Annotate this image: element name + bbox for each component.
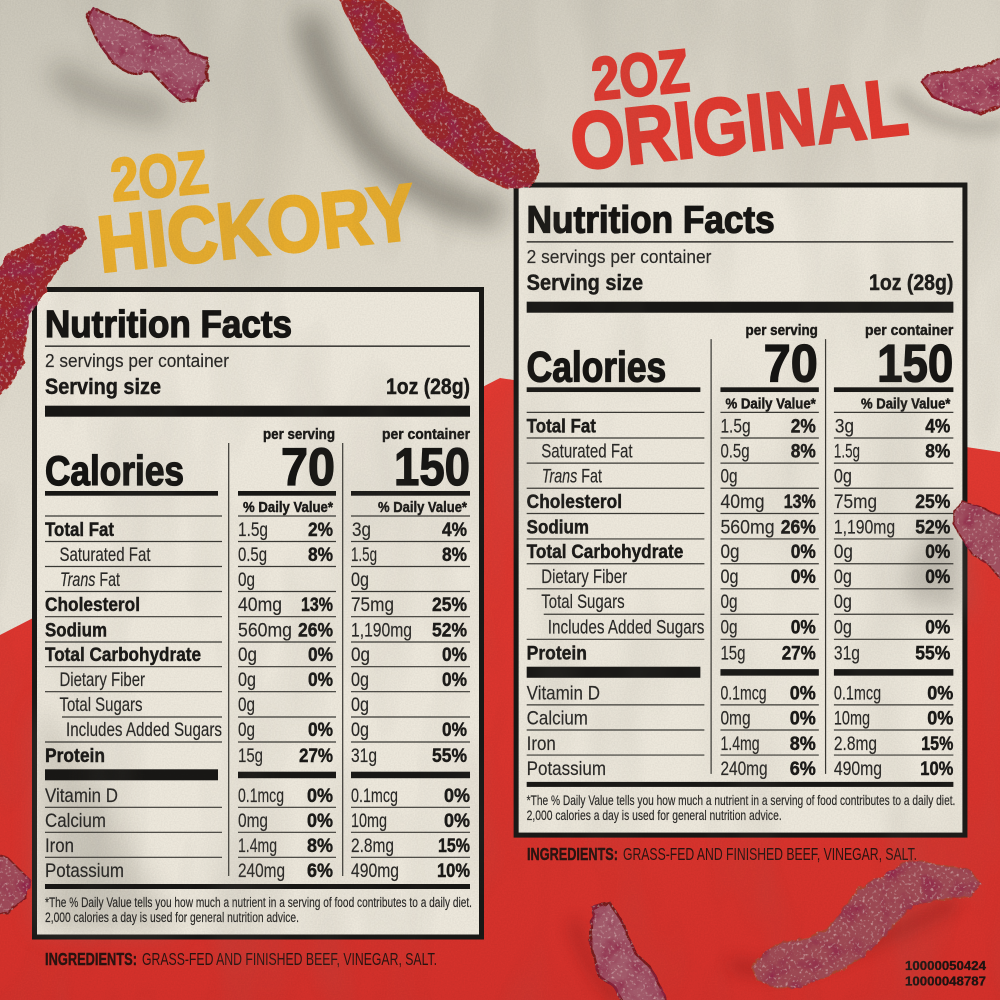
per container column: 0% (444, 810, 470, 832)
per serving column: 15g (720, 642, 746, 664)
per container column: 0g (834, 566, 852, 588)
per serving column: 0mg (720, 708, 751, 730)
nutrient labels: Calcium (527, 708, 588, 730)
per serving column: 0g (720, 466, 738, 488)
per container column: 3g (835, 415, 854, 437)
nutrient labels: Iron (527, 733, 556, 755)
calories header: per serving (746, 322, 818, 339)
icon: jerky piece bottom centre (590, 903, 666, 1000)
per serving column: 6% (790, 758, 816, 780)
nutrient labels: Iron (45, 835, 74, 857)
servings block (527, 241, 953, 313)
per serving column: 240mg (238, 860, 285, 882)
per serving column: 0g (238, 719, 255, 741)
calories header: % Daily Value* (725, 396, 816, 412)
per serving column: 0g (238, 644, 257, 666)
calories header: % Daily Value* (861, 396, 951, 412)
per container column: 52% (915, 516, 950, 538)
heading: 2oz Original: 2OZ (589, 37, 692, 113)
per serving column: 0% (307, 810, 333, 832)
panel: hickory nutrition facts (34, 290, 482, 937)
per container column: 0g (351, 719, 369, 741)
panel shading (903, 507, 961, 617)
per serving column: 1.4mg (238, 835, 277, 857)
per serving column (238, 519, 333, 882)
ingredients: hickory (45, 949, 437, 969)
per serving column: 8% (790, 733, 816, 755)
per serving column (720, 415, 816, 780)
per container column: 0% (442, 669, 467, 691)
per container column: 4% (925, 415, 950, 437)
nutrient labels: Vitamin D (527, 683, 600, 705)
servings block: 1oz (28g) (869, 270, 953, 295)
per serving column: 0g (238, 669, 256, 691)
per container column: 1,190mg (834, 516, 895, 538)
per container column: 55% (432, 745, 467, 767)
per container column: 490mg (351, 860, 399, 882)
per container column: 0% (927, 683, 953, 705)
per container column: 31g (834, 642, 860, 664)
red background shape (0, 378, 1000, 1000)
icon: jerky piece right (953, 502, 1000, 582)
icon: jerky piece top right (922, 56, 1000, 113)
icon: jerky piece bottom right (752, 860, 980, 988)
nutrient labels: Protein (45, 745, 105, 767)
servings block: 1oz (28g) (386, 374, 470, 399)
nutrient labels: Total Sugars (60, 694, 143, 716)
servings block: Serving size (527, 270, 643, 295)
calories header: per container (382, 426, 470, 443)
nutrient labels: Total Fat (45, 519, 114, 541)
per serving column: 560mg (720, 516, 775, 538)
nutrient labels: Protein (527, 642, 587, 664)
per container column: 4% (442, 519, 467, 541)
calories header: 150 (394, 438, 470, 497)
servings block (45, 346, 470, 417)
per serving column: 0% (307, 785, 333, 807)
table rules (527, 339, 953, 787)
nutrient labels: Includes Added Sugars (66, 719, 222, 741)
per serving column: 0g (720, 541, 740, 563)
per serving column: 0% (308, 719, 333, 741)
product codes: 10000048787 (905, 974, 986, 989)
per container column: 0g (834, 591, 852, 613)
footnote (45, 895, 472, 925)
product codes: 10000050424 (905, 958, 987, 973)
per container column: 0g (834, 616, 852, 638)
per container column: 0g (834, 466, 852, 488)
per serving column: 0.5g (238, 544, 267, 566)
nutrient labels: Dietary Fiber (60, 669, 145, 691)
per container column: 10mg (834, 708, 870, 730)
per serving column: 1.4mg (720, 733, 760, 755)
ingredients: original (527, 844, 917, 864)
nutrient labels: Total Sugars (541, 591, 625, 613)
ingredients: hickory: GRASS-FED AND FINISHED BEEF, VINEGAR, SALT. (142, 949, 437, 969)
servings block: 2 servings per container (527, 247, 711, 267)
nutrient labels: Cholesterol (527, 491, 622, 513)
per serving column: 240mg (720, 758, 768, 780)
panel shading (38, 700, 180, 932)
servings block: 2 servings per container (45, 351, 229, 371)
calories header: Calories (527, 343, 666, 390)
per serving column: 0% (308, 669, 333, 691)
per serving column: 0% (791, 566, 816, 588)
per serving column: 13% (784, 491, 816, 513)
calories header: 70 (764, 334, 818, 393)
nutrient labels (527, 415, 705, 780)
per container column: 0% (925, 541, 950, 563)
calories header: 150 (877, 334, 953, 393)
per container column: 0% (925, 566, 950, 588)
per serving column: 27% (782, 642, 816, 664)
per container column: 0g (351, 569, 369, 591)
per container column: 490mg (834, 758, 882, 780)
per container column: 0g (351, 694, 369, 716)
calories header (527, 322, 954, 412)
per container column: 75mg (834, 491, 877, 513)
per serving column: 2% (791, 415, 816, 437)
nutrient labels: Total Fat (527, 415, 596, 437)
per container column (834, 415, 953, 780)
per serving column: 0% (791, 616, 816, 638)
per container column: 25% (432, 594, 467, 616)
per serving column: 8% (307, 835, 333, 857)
nutrient labels: Saturated Fat (60, 544, 151, 566)
nutrient labels: Sodium (45, 620, 107, 642)
icon: jerky piece top left (87, 8, 208, 100)
calories header: per serving (263, 426, 335, 443)
panel: original nutrition facts (516, 185, 965, 835)
ingredients: original: INGREDIENTS: (527, 844, 618, 864)
per serving column: 0% (790, 683, 816, 705)
per serving column: 8% (308, 544, 333, 566)
per serving column: 6% (307, 860, 333, 882)
product codes (905, 958, 987, 989)
per container column: 3g (352, 519, 371, 541)
footnote: *The % Daily Value tells you how much a nutrient in a serving of food contributes to a daily diet. (45, 895, 472, 910)
nutrient labels (45, 519, 222, 882)
per container column: 0g (834, 541, 853, 563)
heading: 2oz Original: ORIGINAL (566, 62, 912, 187)
per serving column: 27% (299, 745, 333, 767)
footnote (527, 793, 955, 823)
per serving column: 560mg (238, 620, 292, 642)
calories header: % Daily Value* (378, 500, 467, 516)
icon: jerky piece left (0, 225, 87, 397)
per container column: 10% (437, 860, 470, 882)
per container column: 0% (442, 644, 467, 666)
nutrient labels: Potassium (45, 860, 124, 882)
per serving column: 1.5g (238, 519, 268, 541)
per serving column: 0.1mcg (720, 683, 767, 705)
per container column: 0% (925, 616, 950, 638)
per container column: 0% (442, 719, 467, 741)
nutrient labels: Total Carbohydrate (45, 644, 201, 666)
per serving column: 0g (720, 616, 738, 638)
per serving column: 13% (301, 594, 333, 616)
per serving column: 40mg (720, 491, 765, 513)
per container column: 0g (351, 644, 370, 666)
nutrition facts title: Nutrition Facts (527, 199, 775, 242)
per container column: 2.8mg (834, 733, 877, 755)
nutrient labels: Cholesterol (45, 594, 140, 616)
per container column: 25% (915, 491, 950, 513)
ingredients: hickory: INGREDIENTS: (45, 949, 137, 969)
nutrient labels: Saturated Fat (541, 441, 633, 463)
per serving column: 40mg (238, 594, 282, 616)
per serving column: 0g (238, 569, 255, 591)
nutrient labels: Total Carbohydrate (527, 541, 683, 563)
table rules (45, 443, 470, 889)
per container column: 55% (915, 642, 950, 664)
nutrient labels: Vitamin D (45, 785, 118, 807)
per container column: 0% (927, 708, 953, 730)
per container column: 1.5g (351, 544, 377, 566)
per container column: 2.8mg (351, 835, 394, 857)
per container column (351, 519, 470, 882)
per serving column: 1.5g (720, 415, 751, 437)
per serving column: 0% (308, 644, 333, 666)
icon: jerky piece top centre (340, 0, 539, 188)
calories header: % Daily Value* (243, 500, 333, 516)
nutrient labels: Trans Fat (60, 569, 120, 591)
per container column: 31g (351, 745, 377, 767)
per serving column: 8% (791, 441, 816, 463)
footnote: 2,000 calories a day is used for general nutrition advice. (527, 808, 782, 823)
nutrient labels: Trans Fat (542, 466, 602, 488)
calories header: per container (865, 322, 954, 339)
per container column: 52% (432, 620, 467, 642)
per container column: 1,190mg (351, 620, 412, 642)
per serving column: 0% (791, 541, 816, 563)
heading: 2oz Hickory: HICKORY (93, 167, 419, 289)
per container column: 8% (442, 544, 467, 566)
per serving column: 0g (238, 694, 255, 716)
per container column: 10mg (351, 810, 387, 832)
per container column: 0.1mcg (834, 683, 881, 705)
per container column: 15% (438, 835, 470, 857)
panel frame (516, 185, 965, 835)
per serving column: 0g (720, 566, 739, 588)
calories header (45, 426, 470, 516)
nutrient labels: Sodium (527, 516, 589, 538)
per serving column: 0g (720, 591, 738, 613)
per container column: 0% (444, 785, 470, 807)
per serving column: 15g (238, 745, 263, 767)
per container column: 8% (925, 441, 950, 463)
nutrient labels: Includes Added Sugars (548, 616, 705, 638)
per container column: 1.5g (834, 441, 860, 463)
heading: 2oz Hickory: 2OZ (108, 138, 211, 214)
servings block: Serving size (45, 374, 161, 399)
per serving column: 0.5g (720, 441, 750, 463)
per serving column: 26% (781, 516, 816, 538)
nutrient labels: Calcium (45, 810, 106, 832)
per serving column: 0mg (238, 810, 268, 832)
per container column: 0.1mcg (351, 785, 398, 807)
per container column: 10% (920, 758, 953, 780)
per serving column: 26% (298, 620, 333, 642)
per container column: 0g (351, 669, 369, 691)
per container column: 15% (921, 733, 953, 755)
per container column: 75mg (351, 594, 394, 616)
icon: jerky piece lower left (0, 855, 30, 913)
per serving column: 0% (790, 708, 816, 730)
footnote: 2,000 calories a day is used for general nutrition advice. (45, 910, 299, 925)
panel frame (34, 290, 482, 937)
nutrition facts title: Nutrition Facts (45, 304, 292, 346)
nutrient labels: Dietary Fiber (541, 566, 627, 588)
calories header: 70 (281, 438, 335, 497)
per serving column: 2% (308, 519, 333, 541)
nutrient labels: Potassium (527, 758, 606, 780)
per serving column: 0.1mcg (238, 785, 284, 807)
calories header: Calories (45, 447, 184, 494)
